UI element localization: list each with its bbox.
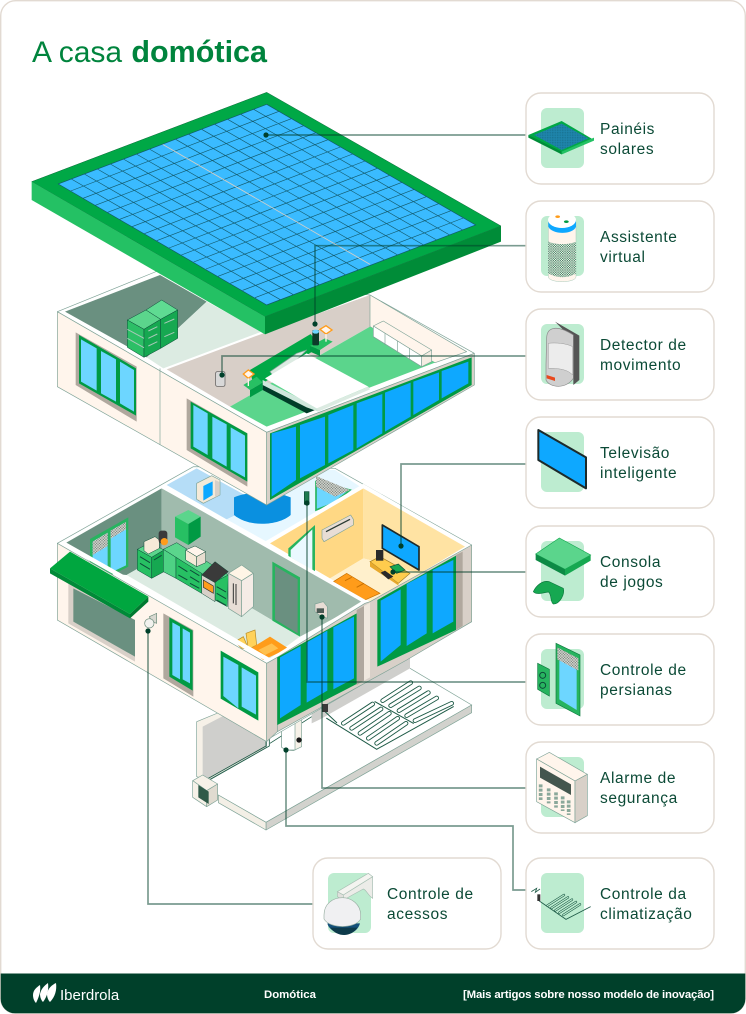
curved stair [234,492,291,524]
bedroom wall and floor [167,295,370,407]
outdoor AC unit [193,775,218,807]
footer [1,974,745,1013]
card: virtual assistant [526,201,714,292]
refrigerant pipes [208,717,312,780]
card: security alarm: Alarme de [600,770,676,787]
wall cabinet [175,510,201,545]
large window left [277,613,357,725]
title: A casa domótica [32,35,268,69]
card: smart TV: inteligente [600,465,677,482]
sofa [333,573,380,600]
card: blinds control: persianas [600,682,673,699]
icon: heating coil [531,888,591,919]
icon: solar panel [528,121,594,154]
connector: solar panels [266,134,526,136]
thermostat [197,476,220,503]
front-left wall [50,543,277,742]
TV [382,525,419,570]
window right [187,398,247,487]
wall door [272,562,300,637]
alarm panel [315,602,327,618]
connector: access control [148,631,313,904]
icon: television [538,430,586,488]
side window [221,651,258,721]
TV unit [370,550,410,585]
window left [76,332,137,422]
rear wall [197,710,267,780]
card: smart TV: Televisão [600,445,670,462]
icon: smart speaker [548,212,576,282]
blind switch [304,492,309,504]
card: solar panels [526,93,714,184]
dining table and chairs [235,630,288,660]
wardrobe [373,321,432,367]
bedside lamps [243,326,332,386]
logo: Iberdrola [33,983,120,1004]
card: motion detector: Detector de [600,337,687,354]
icon: window blind and switch [538,643,580,716]
toaster and coffee machine [144,531,168,554]
card: blinds control [526,634,714,725]
icon: security camera [324,873,373,935]
large window right [377,556,456,667]
connector: climate control [286,750,526,890]
card: virtual assistant: Assistente [600,229,678,246]
slab [218,653,472,830]
card: access control [313,858,501,949]
front door [163,613,193,697]
card: game console [526,526,714,617]
nightstands [243,338,333,397]
storage cabinets [127,300,178,357]
motion detector device [216,372,225,386]
logo: Iberdrola: Iberdrola [60,987,120,1004]
cooker [202,562,228,602]
front-right walls [277,545,472,732]
card: climate control: Controle da [600,886,687,903]
card: security alarm: segurança [600,790,678,807]
back window [90,517,128,575]
card: access control: Controle de [387,886,474,903]
microwave [186,546,206,567]
wall AC [322,515,353,542]
card: motion detector [526,309,714,400]
bed [250,334,370,413]
garage door [68,583,135,662]
security camera [145,613,157,628]
room: foyer [167,468,360,542]
interior wall rims [63,486,468,661]
lower floor [50,467,472,742]
connector: smart TV [401,464,526,546]
card: access control: acessos [387,906,448,923]
card: climate control [526,858,714,949]
card: solar panels: solares [600,141,654,158]
underfloor heating coil [323,683,453,749]
awning [50,552,148,618]
roof frame [32,92,501,317]
connector: blinds control [307,503,526,682]
connector: motion detector [222,356,526,375]
icon: alarm keypad [537,752,587,823]
connector: virtual assistant [315,246,526,324]
heating controller [322,704,328,712]
card: blinds control: Controle de [600,662,687,679]
office floor [147,302,262,368]
solar panel grid [58,104,476,305]
kitchen units [137,543,228,607]
upper floor [57,270,474,505]
top rim [57,270,474,432]
water heater [282,717,302,751]
virtual assistant device [312,330,319,345]
living room door [288,525,315,572]
connector dots [145,132,404,753]
footer topic: Domótica [264,989,317,1001]
card: security alarm [526,742,714,833]
room: living room [270,488,465,602]
building top rim [57,467,472,740]
icon: motion sensor [546,322,579,386]
front-right glazing [267,353,474,505]
room: kitchen [65,488,365,660]
card: smart TV [526,417,714,508]
fridge [228,565,253,617]
footer link: [Mais artigos sobre nosso modelo de inovação] [463,989,714,1001]
card: game console: de jogos [600,574,663,591]
card: virtual assistant: virtual [600,249,646,266]
card: game console: Consola [600,554,661,571]
office wall [65,275,207,357]
connector: security alarm [322,617,526,788]
card: motion detector: movimento [600,357,681,374]
connector: game console [393,571,526,573]
card: solar panels: Painéis [600,121,655,138]
card: climate control: climatização [600,906,692,923]
base slab and climate installation [193,653,472,830]
foyer door with blind [316,476,350,510]
icon: console and gamepad [533,538,591,604]
solar roof [32,92,501,334]
front-left wall [57,312,267,505]
connector lines [145,132,526,904]
